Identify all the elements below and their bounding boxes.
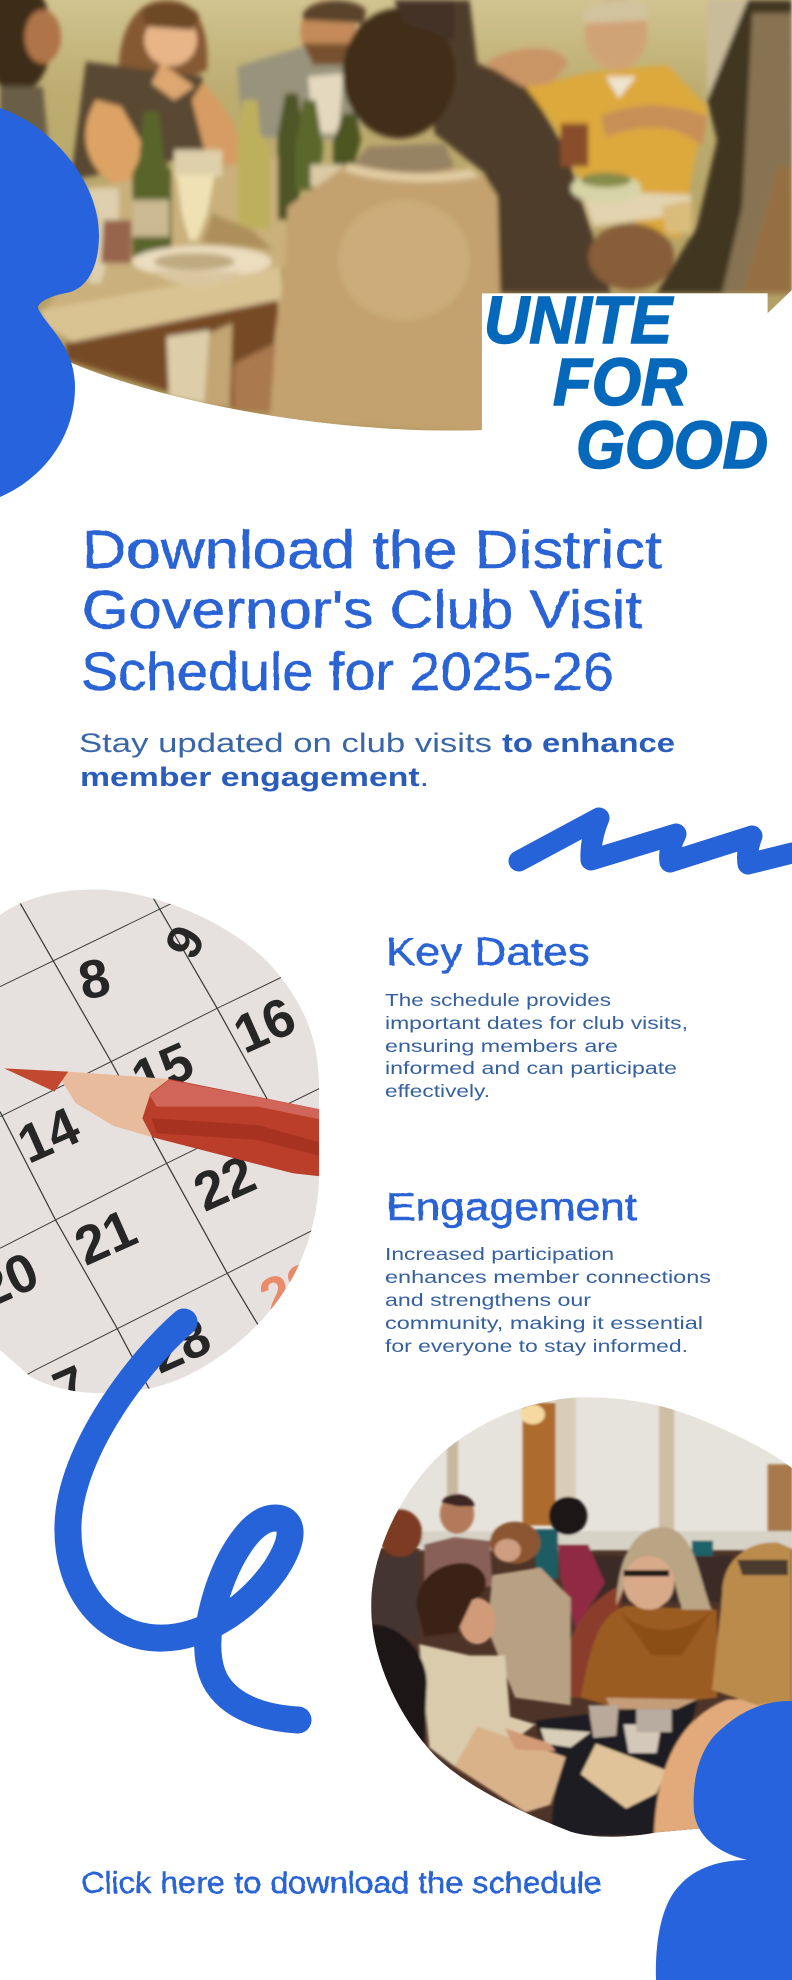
body text: Engagement: and strengthens our [385,1290,591,1310]
body text: Engagement: community, making it essential [385,1313,703,1333]
date 22: 22 [185,1144,264,1223]
dark sweater and hair of seated people, seen from behind [342,0,611,293]
table, cups and books [454,1698,697,1835]
subtitle [79,728,675,792]
pencil body [142,1079,323,1177]
logo line: FOR: FOR [553,345,687,420]
subtitle: bold part line 1: to enhance [502,728,675,758]
title line 3: Schedule for 2025-26 [81,642,614,702]
date 16: 16 [225,986,304,1065]
section: Engagement [385,1186,711,1356]
subtitle: bold part line 2: member engagement . [80,762,429,792]
date 14: 14 [9,1096,88,1175]
title line 2: Governor's Club Visit [82,580,642,640]
body text: Engagement: for everyone to stay informed. [385,1336,688,1356]
sun haze over photo [0,0,792,437]
section: Key Dates [385,931,688,1101]
logo: Unite for Good [484,283,768,483]
blue blob: bottom right [656,1701,792,1980]
table and legs [40,157,288,413]
body text: Key Dates: important dates for club visits, [385,1013,688,1033]
body text: Key Dates [385,990,688,1101]
calendar dates [0,928,299,1392]
woman at far left [0,0,61,140]
cafe photo: group meeting around books and coffee [354,1391,792,1855]
date 21: 21 [66,1198,145,1277]
title [81,520,662,702]
calendar photo background and grid [0,880,323,1400]
bench seats [535,1529,732,1602]
dark hair in foreground [369,1625,427,1744]
body text: Engagement: Increased participation [385,1244,614,1264]
curtain, lamp and window frames [419,1397,792,1550]
decorative blue wave [519,818,792,864]
title line 1: Download the District [82,520,662,580]
body text: Engagement [385,1244,711,1356]
bearded man in denim shirt [237,0,366,140]
blonde woman in orange sweater [581,1527,717,1709]
calendar grid lines [0,895,323,1393]
date 8: 8 [73,947,115,1012]
child's head [588,223,674,290]
woman with short dark hair and polka blouse [417,1563,535,1767]
background people [371,1494,626,1705]
heading: Engagement: Engagement [386,1186,637,1229]
blue scribble loop [68,1322,298,1720]
date in orange: 29 [251,1250,330,1329]
body text: Key Dates: The schedule provides [385,990,611,1010]
pencil wood [58,1072,169,1137]
far table with bowl [561,123,692,233]
call to action link text: Click here to download the schedule [81,1865,602,1900]
blue blob: top left [0,108,99,497]
body text: Key Dates: informed and can participate [385,1058,677,1078]
body text: Engagement: enhances member connections [385,1267,711,1287]
woman with blonde ponytail, from behind [654,1543,792,1835]
plate of food [132,246,272,285]
red pencil [4,1068,323,1177]
open book [454,1726,566,1812]
pencil tip [4,1068,68,1092]
date 28: 28 [140,1306,219,1385]
subtitle: regular part: Stay updated on club visits [79,728,492,758]
hero photo: friends dining around a table [0,0,792,437]
date 9: 9 [154,917,216,967]
date 7: 7 [45,1354,97,1421]
logo line: UNITE: UNITE [484,283,674,358]
logo line: GOOD: GOOD [576,408,768,483]
body text: Key Dates: effectively. [385,1081,490,1101]
standing person at right edge [656,0,792,293]
heading: Key Dates: Key Dates [386,931,590,974]
body text: Key Dates: ensuring members are [385,1036,618,1056]
beige sweater person from behind [235,143,500,433]
date 15: 15 [123,1031,202,1110]
woman with bangs [71,0,239,187]
man in yellow shirt [485,0,707,240]
bottles and glasses [86,93,361,283]
